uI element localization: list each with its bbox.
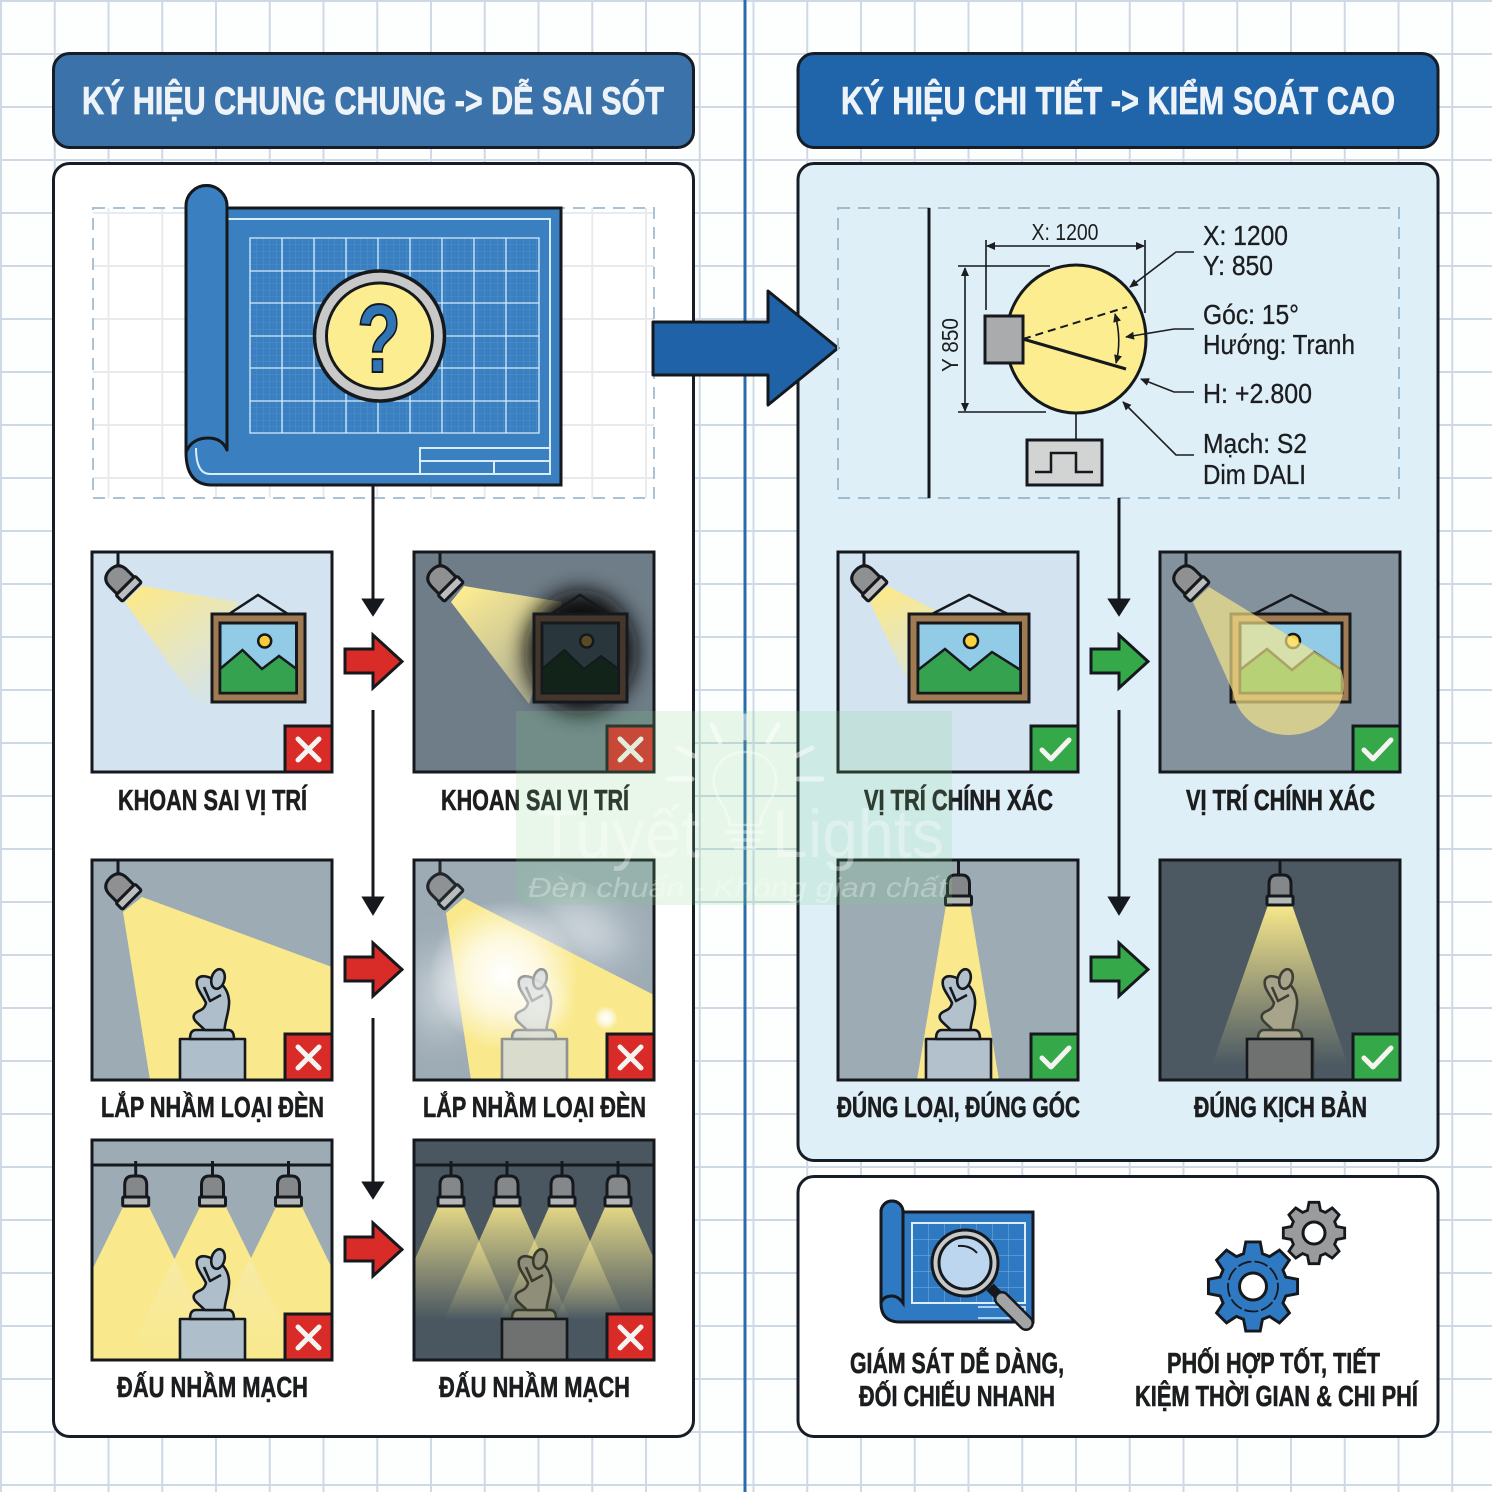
icon: blueprint with question mark	[186, 186, 561, 485]
labels: scenario captions: KHOAN SAI VỊ TRÍ	[441, 783, 630, 817]
watermark: Tuyết Lights logo	[516, 711, 952, 905]
labels: scenario captions: ĐÚNG LOẠI, ĐÚNG GÓC	[837, 1090, 1080, 1124]
diagram: detailed lighting symbol	[838, 208, 1399, 498]
labels: scenario captions: LẮP NHẦM LOẠI ĐÈN	[423, 1090, 646, 1124]
labels: scenario captions: ĐẤU NHẦM MẠCH	[439, 1370, 630, 1404]
tile: correct position after	[1160, 552, 1400, 772]
text: benefit monitoring: ĐỐI CHIẾU NHANH	[859, 1379, 1055, 1413]
flow arrows: vertical connectors left and right	[364, 600, 1128, 1197]
labels: scenario captions: LẮP NHẦM LOẠI ĐÈN	[101, 1090, 324, 1124]
icon: blueprint with question mark: ?	[357, 284, 401, 393]
panel: generic symbols	[54, 164, 694, 1436]
diagram: detailed lighting symbol: Y 850	[937, 318, 963, 372]
arrows: red error transitions	[345, 635, 402, 1276]
tile: wrong circuit before	[90, 1138, 334, 1362]
labels: scenario captions: ĐẤU NHẦM MẠCH	[117, 1370, 308, 1404]
labels: scenario captions: VỊ TRÍ CHÍNH XÁC	[1186, 783, 1375, 817]
header: generic symbols: KÝ HIỆU CHUNG CHUNG -> DỄ SAI SÓT	[82, 79, 664, 123]
diagram: detailed lighting symbol: X: 1200	[1203, 220, 1288, 251]
diagram: detailed lighting symbol: Dim DALI	[1203, 459, 1306, 490]
text: benefit monitoring: GIÁM SÁT DỄ DÀNG,	[850, 1346, 1064, 1380]
labels: scenario captions	[101, 783, 1375, 1404]
panel: detailed symbols	[798, 164, 1438, 1160]
diagram: detailed lighting symbol: H: +2.800	[1203, 378, 1312, 409]
panel: benefits	[798, 1176, 1438, 1436]
diagram: detailed lighting symbol: X: 1200	[1032, 219, 1098, 245]
text: benefit coordination	[1135, 1346, 1419, 1413]
icon: gears	[1208, 1202, 1345, 1331]
tile: right type and angle before	[838, 860, 1078, 1089]
tile: wrong circuit after	[412, 1138, 656, 1362]
diagram: detailed lighting symbol: Y: 850	[1203, 250, 1273, 281]
dashed frame: generic plan	[93, 208, 654, 498]
big arrow: generic to detailed	[653, 291, 838, 405]
header: detailed symbols	[798, 54, 1438, 148]
arrows: green correct transitions	[1091, 635, 1148, 996]
labels: scenario captions: KHOAN SAI VỊ TRÍ	[118, 783, 308, 817]
diagram: detailed lighting symbol: Hướng: Tranh	[1203, 329, 1355, 360]
icon: blueprint with magnifier	[881, 1201, 1033, 1323]
diagram: detailed lighting symbol: Mạch: S2	[1203, 428, 1307, 459]
text: benefit monitoring	[850, 1346, 1064, 1413]
header: generic symbols	[54, 54, 694, 148]
labels: scenario captions: ĐÚNG KỊCH BẢN	[1194, 1090, 1367, 1124]
tile: wrong drilling position before	[92, 552, 332, 772]
tile: wrong lamp type before	[92, 860, 332, 1089]
diagram: detailed lighting symbol: Góc: 15°	[1203, 299, 1299, 330]
tile: right scene after	[1160, 860, 1400, 1089]
watermark: Tuyết Lights logo: Lights	[772, 796, 944, 872]
tile: wrong lamp type after (glare)	[414, 860, 654, 1089]
labels: scenario captions: VỊ TRÍ CHÍNH XÁC	[864, 783, 1053, 817]
tile: correct position before	[838, 552, 1078, 772]
watermark: Tuyết Lights logo: Tuyết	[537, 796, 700, 872]
watermark: Tuyết Lights logo: Đèn chuẩn - Không gian chất	[528, 872, 948, 903]
arrow: plan down to row one	[372, 486, 374, 600]
text: benefit coordination: PHỐI HỢP TỐT, TIẾT	[1167, 1346, 1380, 1380]
arrow: diagram down to row one	[1118, 498, 1120, 600]
tile: wrong drilling position after	[414, 552, 654, 772]
